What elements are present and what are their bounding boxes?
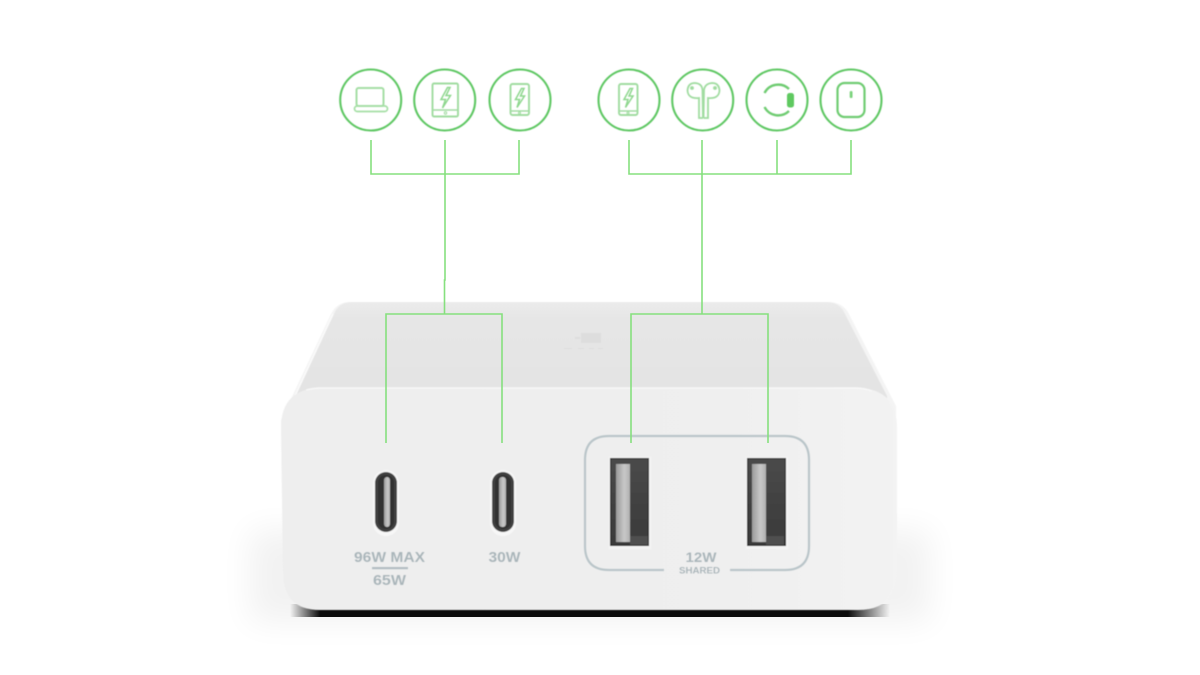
icon: smartwatch (746, 70, 808, 130)
front top highlight (306, 388, 872, 391)
port: USB-C 2 (490, 470, 516, 536)
regulatory marks (564, 333, 603, 349)
label: 96W MAX / 65W: 65W (373, 573, 406, 589)
port: USB-A 1 (609, 457, 651, 549)
label: 12W SHARED: SHARED (679, 566, 721, 576)
port: USB-A 2 (746, 457, 788, 549)
icon: phone (490, 70, 550, 130)
icon: phone (USB-A) (598, 70, 660, 130)
left side highlight (294, 314, 333, 398)
icon: earbuds (672, 70, 733, 130)
top face (292, 302, 887, 410)
connector: right devices to USB-A ports (629, 140, 851, 443)
label: 96W MAX / 65W (354, 550, 425, 589)
icon: laptop (340, 70, 401, 130)
icon: tablet (414, 70, 475, 130)
soft ground shadow (250, 530, 930, 622)
label: 12W SHARED (679, 549, 721, 576)
label: 30W: 30W (488, 550, 521, 566)
port: USB-C 1 (373, 470, 399, 536)
label: 12W SHARED: 12W (686, 549, 717, 565)
label: 96W MAX / 65W: 96W MAX (354, 550, 425, 566)
charger body (281, 302, 897, 610)
connector: left devices to USB-C ports (371, 140, 519, 443)
front face (281, 388, 897, 610)
side silhouette (281, 302, 896, 430)
contact shadow under charger (290, 604, 890, 617)
icon: mouse (820, 70, 882, 130)
USB-A group outline (585, 436, 809, 570)
